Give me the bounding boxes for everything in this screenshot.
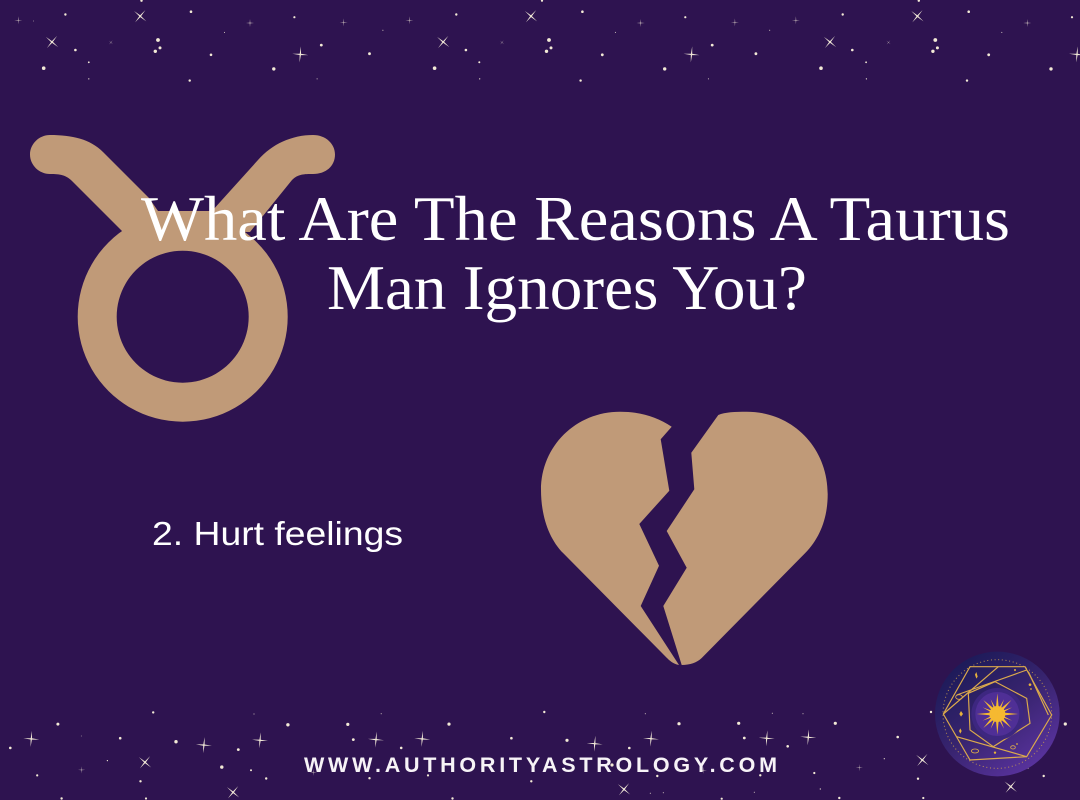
logo: astrology emblem bbox=[935, 652, 1060, 776]
starfield: top band bbox=[14, 0, 1080, 82]
title: What Are The Reasons A Taurus bbox=[141, 183, 1010, 254]
starfield: bottom band bbox=[9, 711, 1067, 800]
title bbox=[141, 183, 1010, 323]
icon: taurus zodiac symbol bbox=[30, 135, 335, 422]
text: reason 2: 2. Hurt feelings bbox=[152, 515, 403, 552]
icon: broken heart bbox=[541, 412, 828, 665]
title: Man Ignores You? bbox=[327, 252, 807, 323]
website url: WWW.AUTHORITYASTROLOGY.COM bbox=[304, 753, 777, 777]
